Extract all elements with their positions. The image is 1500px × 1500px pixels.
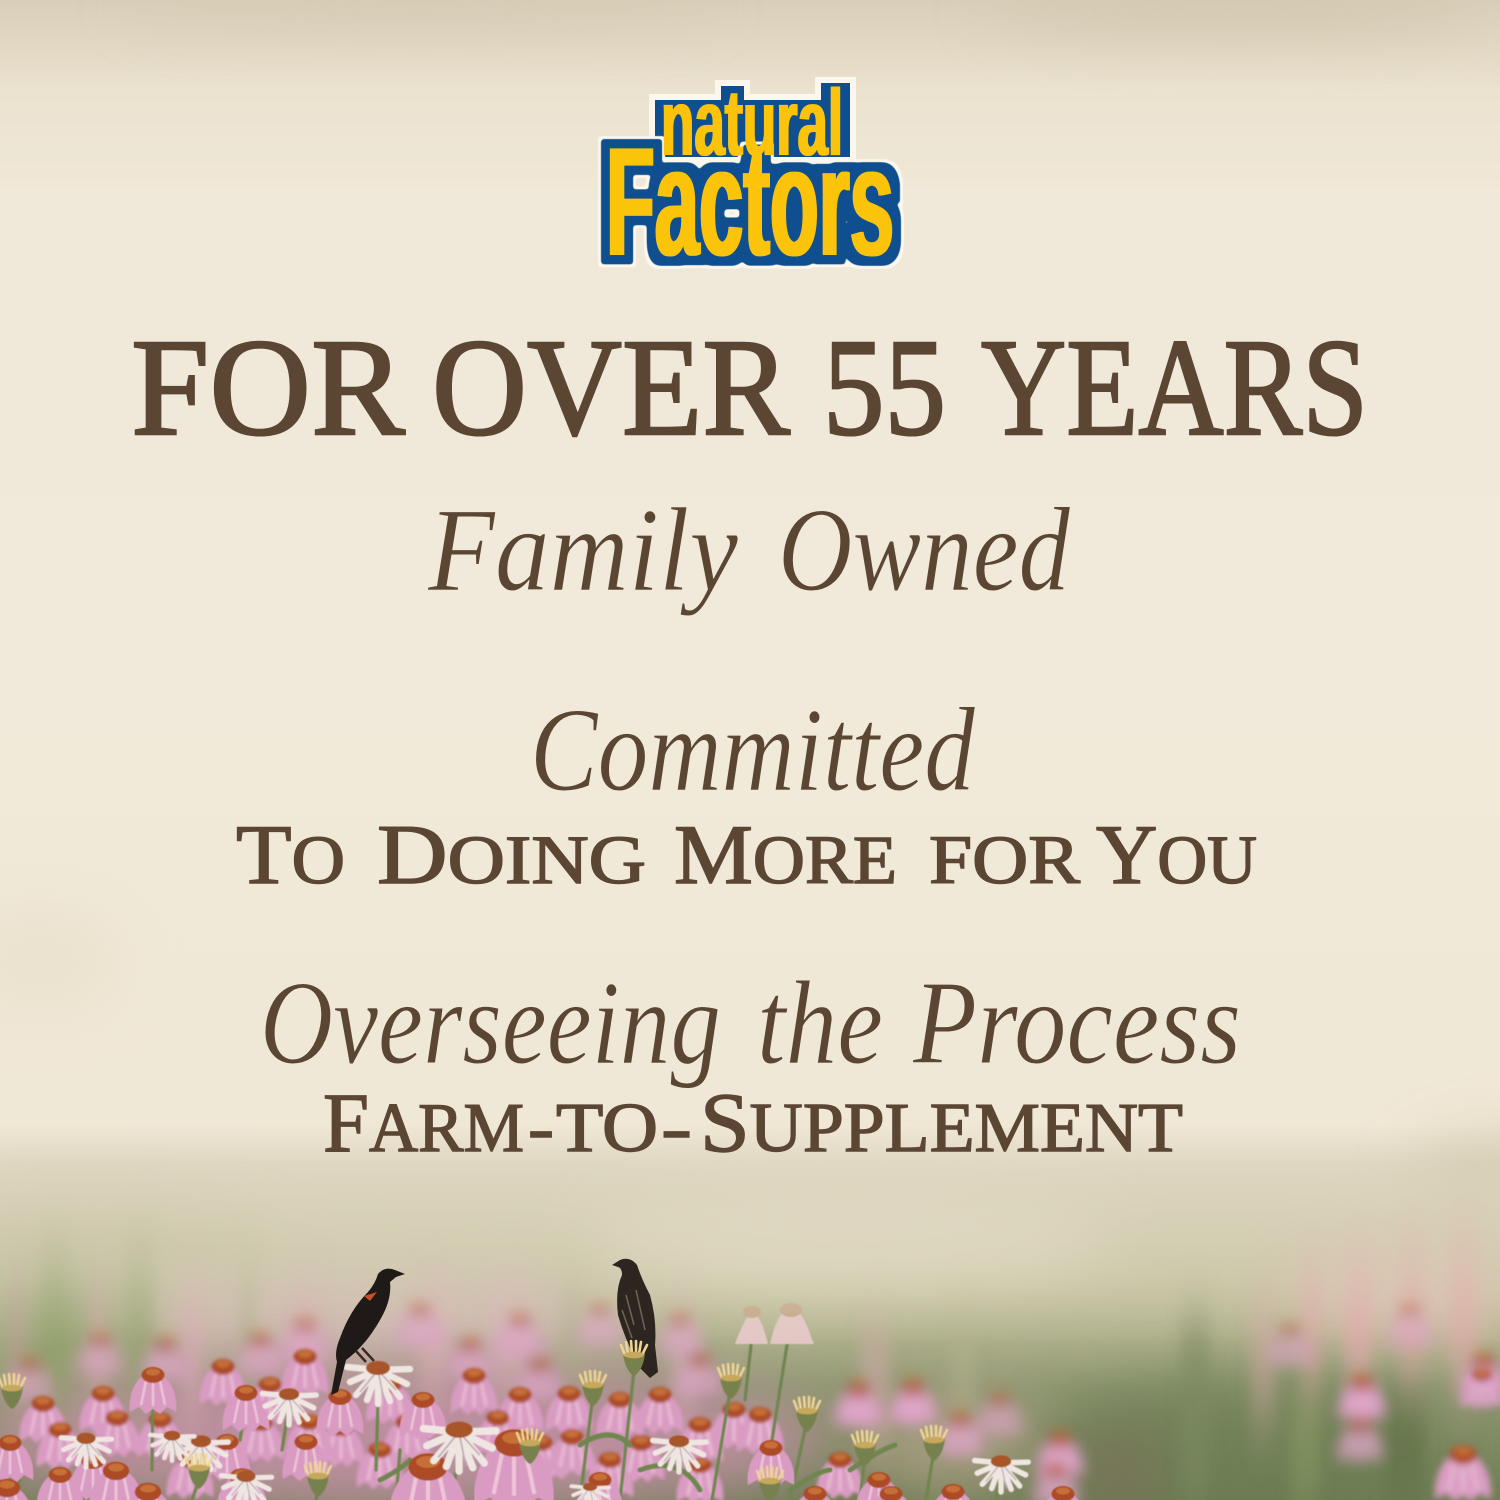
script line: Family Owned: Owned (778, 483, 1071, 616)
blurred pink flower at right edge (1435, 1368, 1500, 1500)
stems and leaves (8, 1345, 1001, 1500)
small caps line: to doing more for you: MORE (674, 808, 897, 902)
foreground echinacea flowers (0, 1367, 1086, 1500)
heading: for over 55 years: FOR (131, 311, 405, 465)
distant blurred flowers (7, 1302, 1500, 1500)
small caps line: to doing more for you: DOING (377, 808, 646, 902)
fog over meadow (0, 1125, 1500, 1345)
small caps line: to doing more for you (236, 808, 1257, 902)
tall pale flowers (735, 1303, 814, 1344)
mid-distance flowers (20, 1349, 863, 1500)
script line: Overseeing the Process (260, 956, 1241, 1089)
bird: female blackbird (612, 1259, 658, 1378)
blurred meadow colour washes (0, 1140, 1500, 1500)
logo panel behind natural (652, 80, 853, 160)
small caps line: to doing more for you: FOR (929, 822, 1080, 898)
small caps line: farm-to-supplement (323, 1076, 1183, 1170)
logo word: Factors with blue and white outline: Factors (606, 115, 894, 288)
script line: Family Owned: Family (427, 483, 739, 616)
script line: Family Owned (427, 483, 1071, 616)
script line: Overseeing the Process: Process (912, 956, 1241, 1089)
logo: Natural Factors (606, 70, 894, 288)
heading: for over 55 years (131, 311, 1368, 465)
misty meadow photograph (0, 1125, 1500, 1500)
seed head under bird (621, 1341, 647, 1376)
logo word: natural: natural (661, 70, 843, 176)
small caps line: to doing more for you: TO (236, 808, 345, 902)
small caps line: to doing more for you: YOU (1096, 808, 1257, 902)
small caps line: farm-to-supplement: - (661, 1090, 692, 1167)
script line: Committed: Committed (530, 683, 976, 816)
heading: for over 55 years: YEARS (981, 311, 1368, 465)
white daisies (61, 1361, 1028, 1500)
heading: for over 55 years: OVER (432, 311, 790, 465)
heading: for over 55 years: 55 (823, 311, 946, 465)
script line: Overseeing the Process: Overseeing (260, 956, 721, 1089)
small caps line: farm-to-supplement: SUPPLEMENT (700, 1076, 1183, 1170)
small caps line: farm-to-supplement: - (528, 1090, 554, 1167)
vertical blurred streaks (10, 1230, 1478, 1500)
bird: red-winged blackbird (331, 1269, 405, 1395)
script line: Overseeing the Process: the (757, 956, 883, 1089)
spiky seed heads (0, 1364, 947, 1500)
small caps line: farm-to-supplement: FARM (323, 1076, 524, 1170)
small caps line: farm-to-supplement: TO (556, 1090, 658, 1167)
